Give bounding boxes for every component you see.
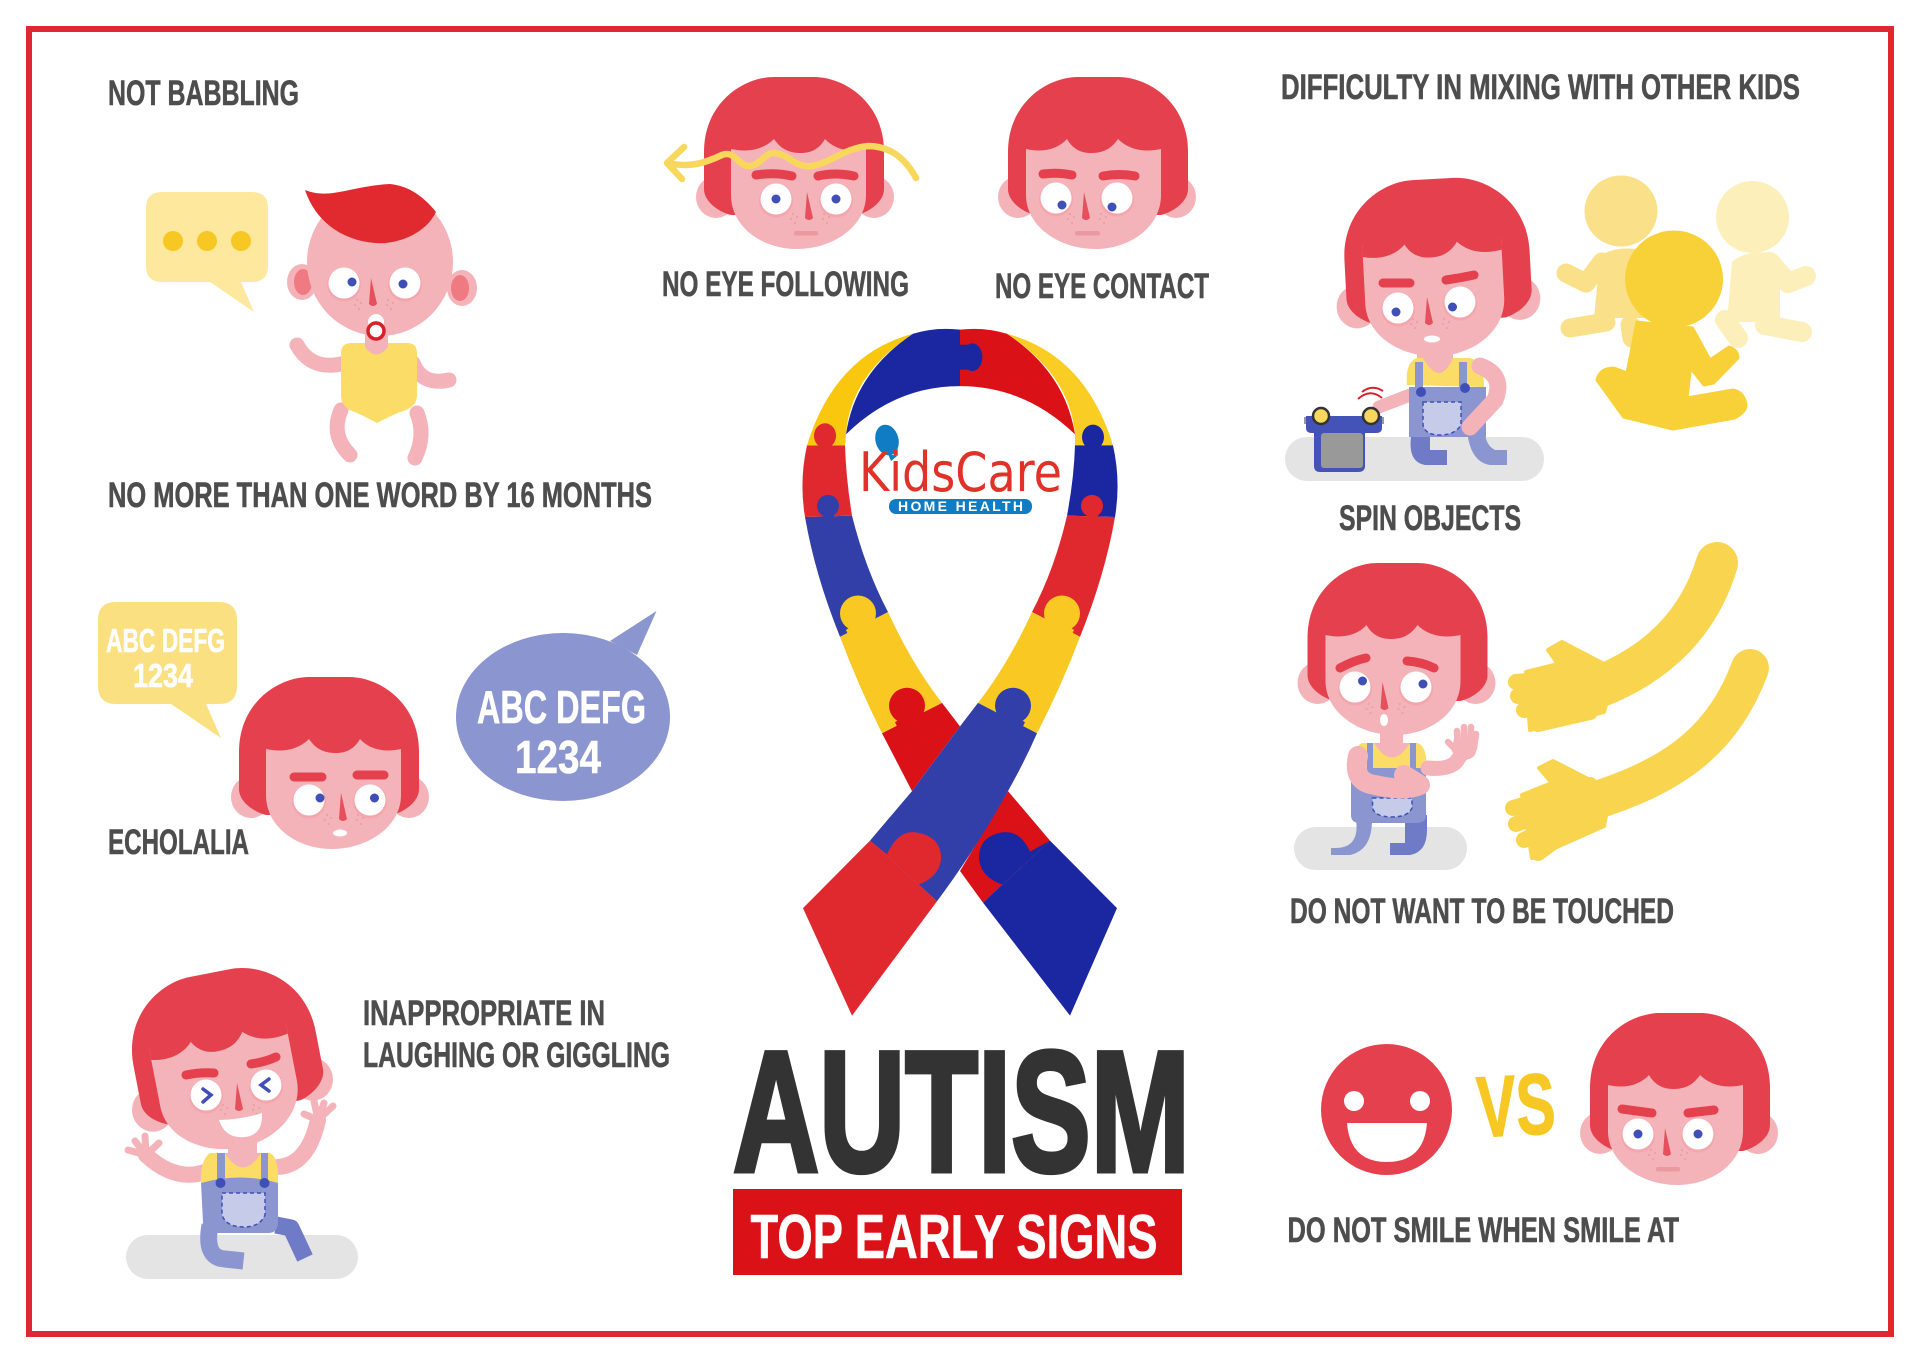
silhouette: back right child — [1716, 181, 1806, 338]
silhouette: back left child — [1566, 176, 1658, 338]
puzzle knobs — [814, 343, 1104, 730]
logo: KidsCare Home Health: KidsCare — [859, 441, 1062, 504]
heading: no more than one word: NO MORE THAN ONE WORD BY 16 MONTHS — [108, 476, 652, 515]
logo: KidsCare Home Health — [859, 422, 1062, 514]
icon: reaching arm upper — [1516, 563, 1717, 730]
subtitle banner: TOP EARLY SIGNS — [750, 1203, 1158, 1272]
arrow: wavy gaze path — [667, 146, 916, 179]
head: echoing child — [231, 677, 429, 849]
tail under right — [960, 791, 1050, 903]
icon: reaching arm lower — [1513, 668, 1750, 858]
floor shadow — [1294, 827, 1467, 870]
silhouette: front child — [1597, 230, 1746, 429]
illustration: baby with speech bubble — [146, 184, 477, 458]
icon: balloon — [872, 422, 902, 461]
heading: no eye following: NO EYE FOLLOWING — [662, 265, 909, 304]
label: vs: VS — [1475, 1056, 1558, 1156]
illustration: unsmiling head — [1580, 1013, 1778, 1185]
illustration: laughing child — [109, 954, 358, 1279]
icon: purple speech bubble — [456, 611, 670, 801]
heading: inappropriate laughing — [363, 994, 670, 1075]
illustration: no eye contact head — [998, 77, 1196, 249]
logo: KidsCare Home Health: HOME HEALTH — [898, 498, 1023, 514]
puzzle awareness ribbon — [802, 329, 1118, 1016]
floor shadow — [126, 1235, 358, 1279]
illustration: no eye following head — [667, 77, 916, 249]
tail left — [803, 841, 937, 1016]
heading: no eye contact: NO EYE CONTACT — [995, 267, 1209, 306]
illustration: echolalia — [98, 602, 670, 849]
icon: yellow speech bubble — [98, 602, 237, 738]
icon: dotted speech bubble — [146, 192, 268, 312]
icon: smiley face — [1321, 1044, 1452, 1175]
heading: inappropriate laughing: INAPPROPRIATE IN — [363, 994, 605, 1033]
illustration: child avoiding touch — [1294, 563, 1750, 870]
icon: yellow speech bubble: 1234 — [133, 657, 194, 694]
illustration: child with spinning toy — [1285, 174, 1544, 481]
icon: purple speech bubble: 1234 — [515, 731, 601, 783]
heading: do not want to be touched: DO NOT WANT TO BE TOUCHED — [1290, 892, 1674, 931]
heading: spin objects: SPIN OBJECTS — [1339, 499, 1521, 538]
subtitle banner — [733, 1189, 1182, 1275]
baby figure — [287, 184, 477, 458]
title: autism: AUTISM — [733, 1016, 1190, 1208]
icon: toy — [1304, 388, 1384, 472]
heading: inappropriate laughing: LAUGHING OR GIGGLING — [363, 1036, 670, 1075]
icon: purple speech bubble: ABC DEFG — [477, 681, 646, 733]
crossing blue band — [870, 703, 1037, 901]
heading: not babbling: NOT BABBLING — [108, 74, 299, 113]
floor shadow — [1285, 437, 1544, 481]
illustration: group of yellow kids — [1566, 176, 1806, 429]
heading: echolalia: ECHOLALIA — [108, 823, 249, 862]
heading: do not smile: DO NOT SMILE WHEN SMILE AT — [1288, 1211, 1679, 1250]
left loop pieces — [882, 703, 960, 791]
right loop pieces — [960, 329, 1075, 434]
icon: yellow speech bubble: ABC DEFG — [106, 622, 225, 659]
